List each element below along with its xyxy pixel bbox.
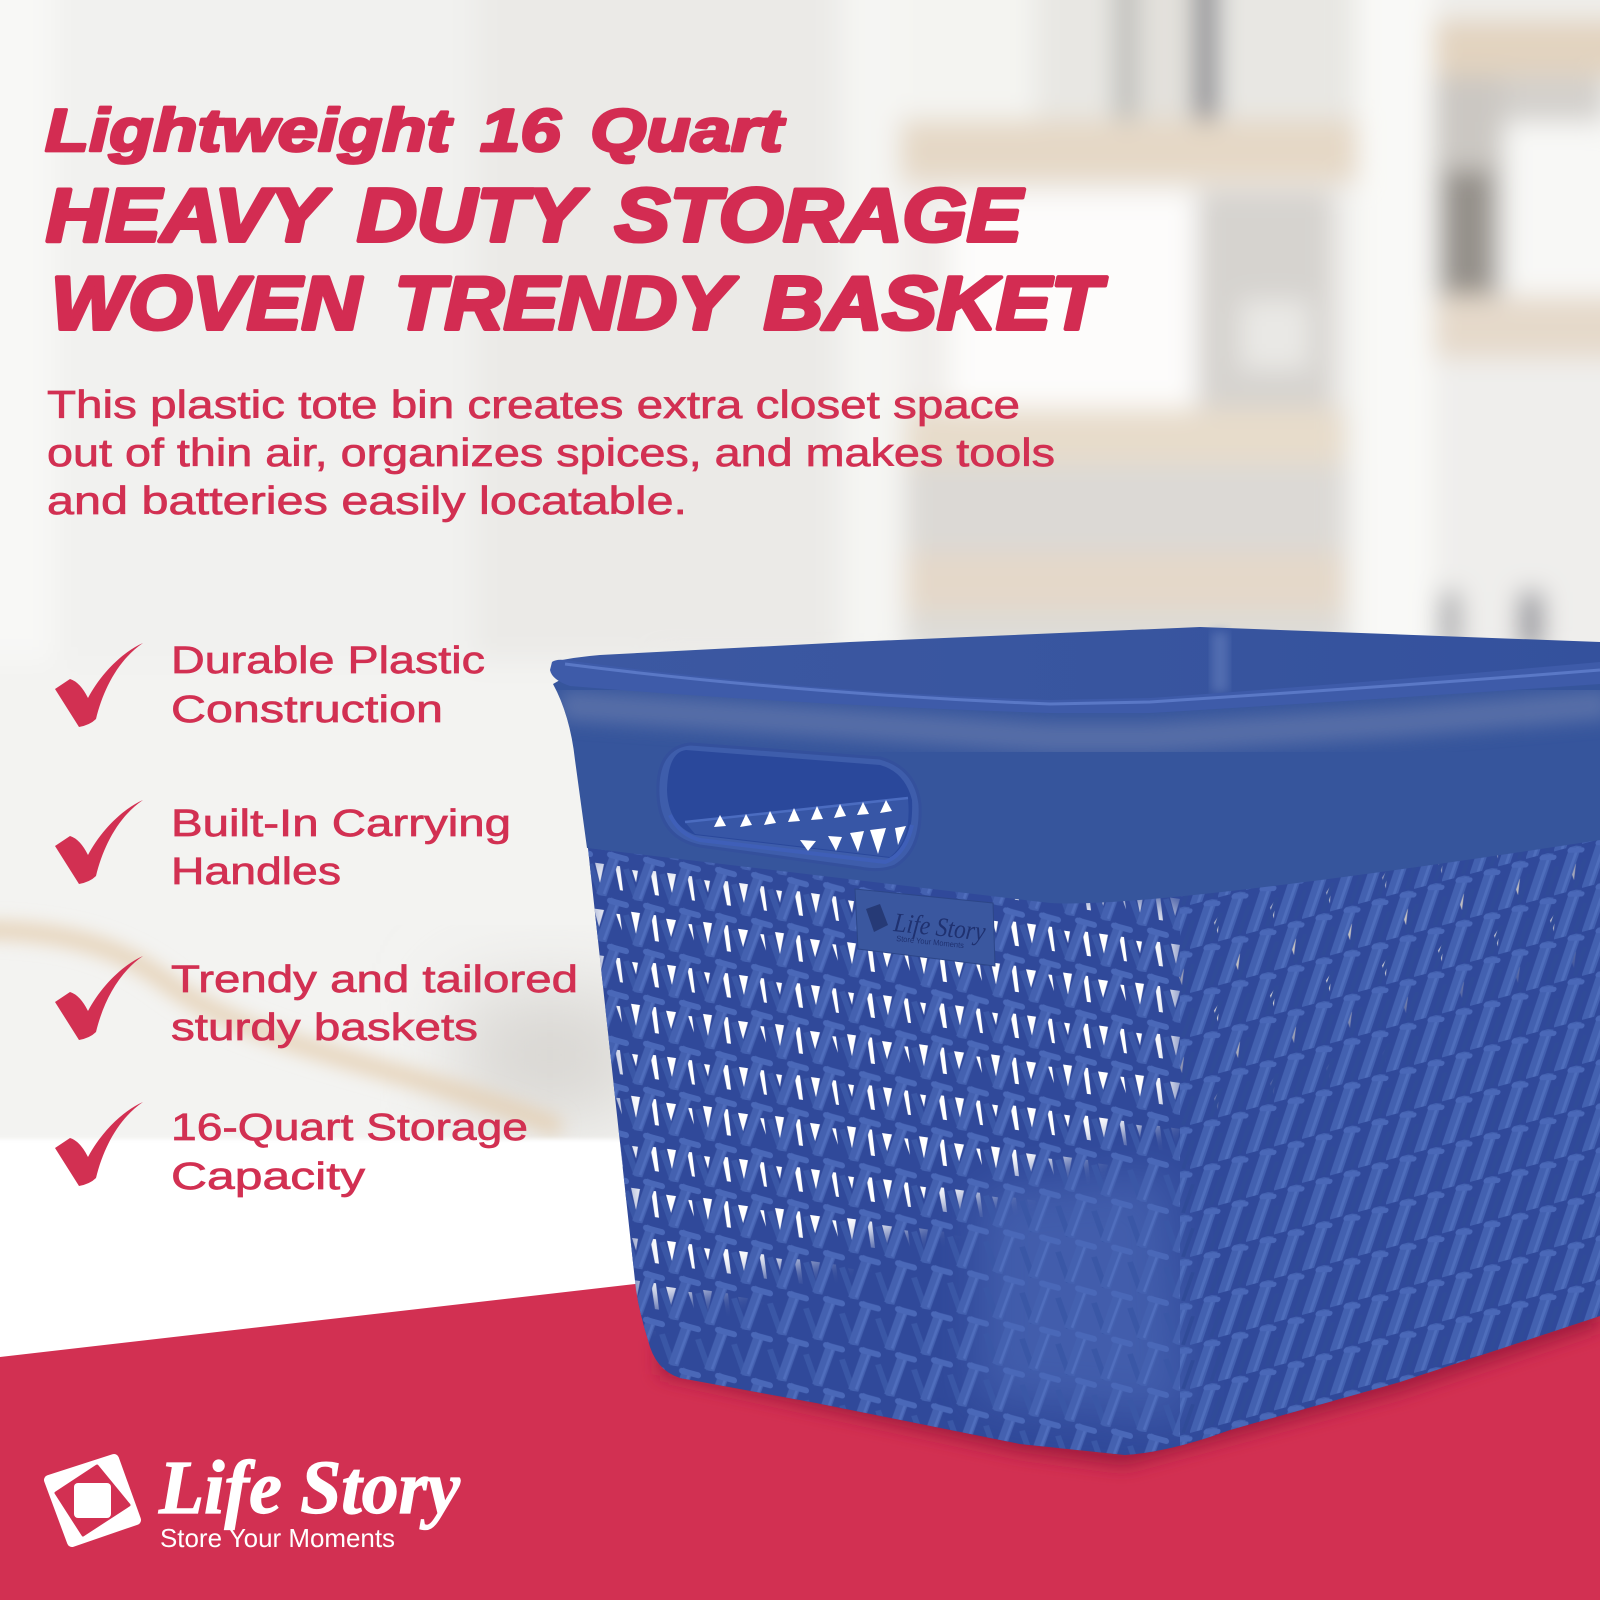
handle lower lip bbox=[670, 815, 912, 862]
logo: Life Story bbox=[49, 1446, 460, 1553]
feature: trendy baskets: Trendy and tailored bbox=[171, 959, 578, 1001]
feature: carrying handles bbox=[55, 800, 511, 893]
description paragraph bbox=[47, 384, 1055, 523]
heading line 3: WOVEN TRENDY BASKET bbox=[51, 261, 1108, 345]
handle view through bbox=[685, 798, 909, 857]
heading line 2: HEAVY DUTY STORAGE bbox=[46, 173, 1024, 257]
crimson footer band bbox=[0, 1170, 1600, 1600]
heading bbox=[45, 97, 1108, 345]
product photo: blue woven basket bbox=[540, 627, 1600, 1470]
feature: durable plastic: Construction bbox=[171, 689, 443, 731]
icon: check mark bbox=[55, 643, 143, 727]
feature: durable plastic: Durable Plastic bbox=[171, 640, 485, 682]
logo: Life Story: Life Story bbox=[158, 1446, 460, 1530]
interior back wall highlight bbox=[1212, 632, 1228, 692]
basket shadow bbox=[660, 1280, 1600, 1466]
upper solid band bbox=[553, 680, 1600, 904]
rim lip bbox=[550, 660, 1600, 713]
brand tag on basket: Life Story bbox=[892, 907, 987, 947]
weave strands bbox=[570, 820, 1180, 1470]
logo: Life Story: Store Your Moments bbox=[160, 1523, 395, 1553]
description paragraph: This plastic tote bin creates extra closet space bbox=[47, 384, 1020, 427]
feature: durable plastic bbox=[55, 640, 485, 731]
feature: storage capacity bbox=[55, 1102, 528, 1198]
icon: check mark bbox=[55, 1102, 143, 1186]
rim highlight bbox=[565, 664, 1600, 704]
weave holes bbox=[594, 862, 1180, 1310]
basket interior bbox=[552, 627, 1600, 707]
icon: check mark bbox=[55, 800, 143, 884]
feature: storage capacity: Capacity bbox=[171, 1156, 365, 1198]
feature: trendy baskets: sturdy baskets bbox=[171, 1007, 478, 1049]
description paragraph: out of thin air, organizes spices, and makes tools bbox=[47, 432, 1055, 475]
icon: logo mark bbox=[49, 1459, 136, 1542]
feature list bbox=[55, 640, 578, 1198]
woven body bbox=[570, 820, 1600, 1470]
feature: storage capacity: 16-Quart Storage bbox=[171, 1107, 528, 1149]
heading line 1: Lightweight 16 Quart bbox=[45, 97, 787, 164]
brand tag on basket bbox=[855, 889, 995, 966]
description paragraph: and batteries easily locatable. bbox=[47, 480, 687, 523]
feature: carrying handles: Built-In Carrying bbox=[171, 803, 511, 845]
handle recess bbox=[658, 744, 920, 870]
brand tag on basket: Store Your Moments bbox=[896, 934, 964, 950]
handle opening bbox=[667, 750, 912, 858]
feature: trendy baskets bbox=[55, 956, 578, 1049]
feature: carrying handles: Handles bbox=[171, 851, 341, 893]
icon: check mark bbox=[55, 956, 143, 1040]
